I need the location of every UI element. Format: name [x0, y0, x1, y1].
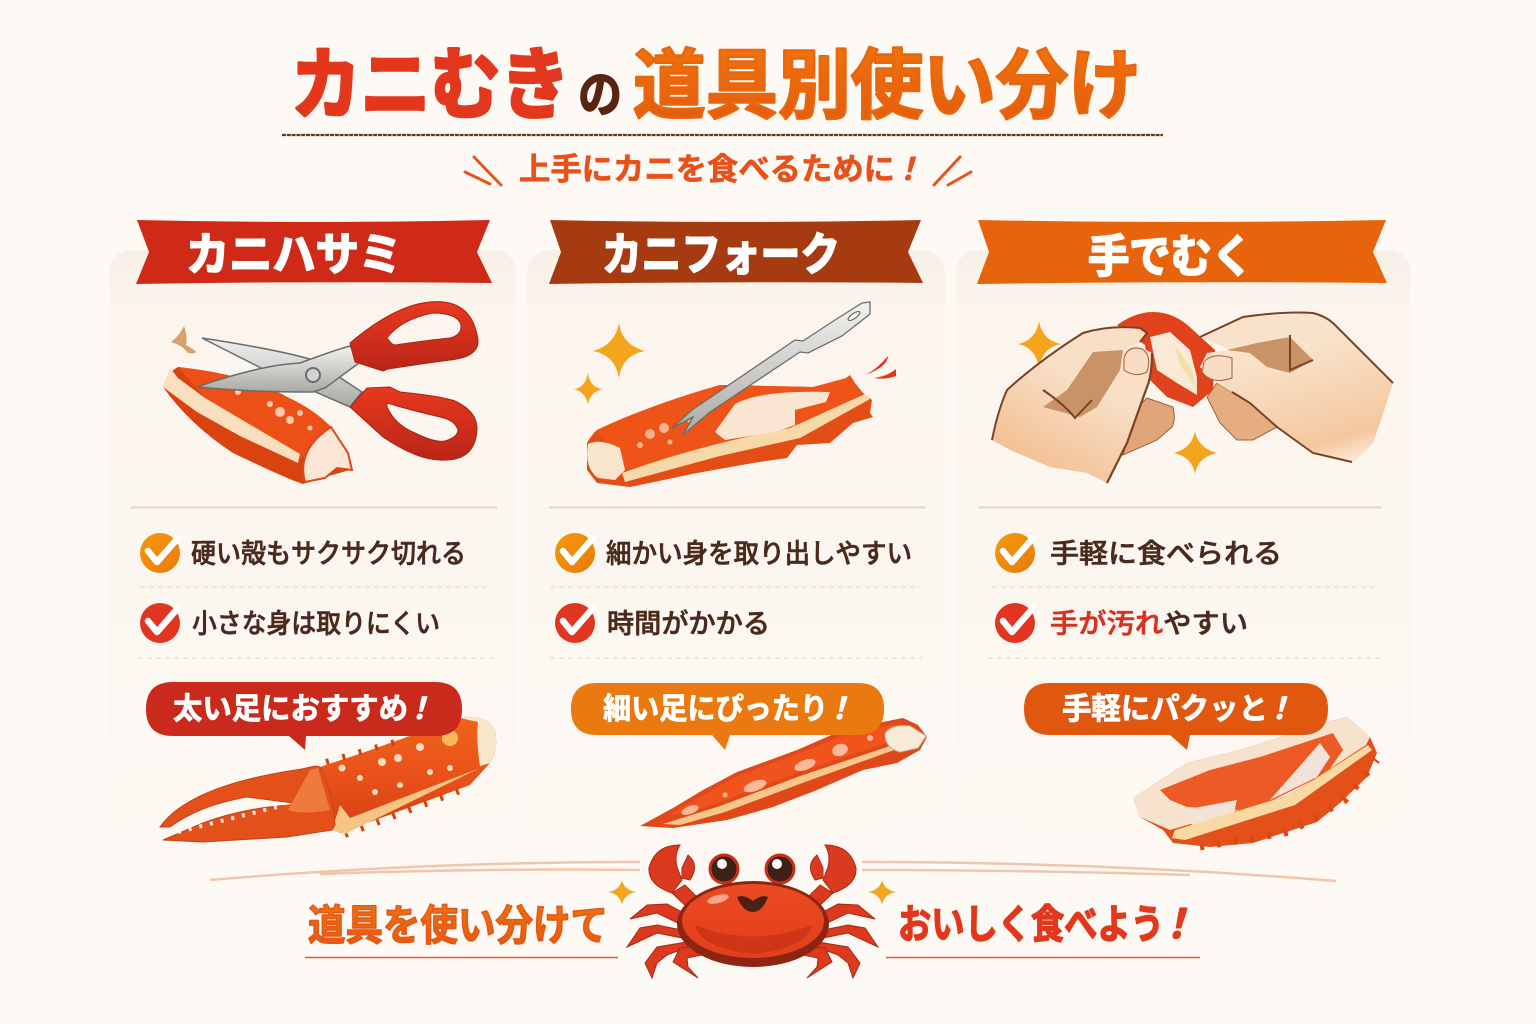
- left hand fingers behind: [1123, 398, 1174, 455]
- panel: カニフォーク: [527, 220, 945, 870]
- speech bubble: [1024, 683, 1328, 750]
- demerit row: 時間がかかる: [607, 609, 770, 639]
- icon: right accent strokes: [934, 157, 971, 185]
- upper handle: [350, 302, 478, 371]
- illustration: thin crab leg: [640, 718, 927, 828]
- droplets: [171, 326, 196, 353]
- illustration: hands peeling crab: [992, 312, 1393, 483]
- fork: [672, 302, 870, 435]
- ribbon heading: [977, 220, 1387, 284]
- icon: footer sparkle left: [608, 880, 636, 905]
- ribbon heading: カニハサミ: [186, 229, 402, 280]
- crab mascot: [627, 845, 878, 978]
- merit row: [995, 533, 1282, 573]
- footer message left: 道具を使い分けて: [308, 902, 608, 949]
- icon: small sparkle: [574, 373, 603, 404]
- ribbon heading: カニフォーク: [602, 229, 840, 280]
- icon: orange check: [140, 533, 180, 573]
- merit row: [555, 533, 912, 573]
- speech bubble: ！: [404, 693, 434, 726]
- illustration: peeled crab piece: [1133, 717, 1377, 847]
- speech bubble: [571, 683, 884, 750]
- merit row: [140, 533, 466, 573]
- icon: red check: [140, 603, 180, 643]
- footer message right: ！: [1156, 903, 1196, 947]
- speech bubble: 細い足にぴったり: [603, 693, 828, 726]
- demerit row: [140, 603, 440, 643]
- left hand: [992, 327, 1152, 483]
- demerit row: [555, 603, 770, 643]
- icon: red check: [995, 603, 1035, 643]
- shell body: [677, 881, 829, 967]
- icon: red check: [555, 603, 595, 643]
- subtitle: ！: [892, 152, 923, 187]
- ribbon heading: [549, 220, 923, 284]
- speech bubble: [146, 682, 462, 750]
- illustration: crab fork in leg: [574, 302, 896, 487]
- right hand: [1200, 312, 1393, 463]
- icon: footer sparkle right: [868, 880, 896, 905]
- illustration: scissors cutting crab leg: [163, 302, 478, 484]
- icon: orange check: [555, 533, 595, 573]
- legs and claws right: [803, 845, 878, 978]
- subtitle: 上手にカニを食べるために: [519, 152, 895, 187]
- ribbon heading: 手でむく: [1088, 231, 1253, 282]
- merit row: 細かい身を取り出しやすい: [606, 539, 912, 569]
- crab piece: [1117, 312, 1215, 407]
- ribbon heading: [136, 220, 492, 284]
- title: カニむき: [291, 41, 570, 129]
- blades: [197, 338, 363, 407]
- title: [291, 41, 1141, 129]
- icon: sparkle: [1174, 431, 1217, 474]
- separator: [549, 506, 926, 509]
- speech bubble: ！: [824, 693, 854, 726]
- smile: [737, 896, 768, 912]
- crab leg open: [587, 375, 873, 487]
- right hand fingers behind: [1207, 383, 1277, 440]
- speech bubble: ！: [1264, 693, 1294, 726]
- merit row: 硬い殻もサクサク切れる: [191, 539, 466, 569]
- merit row: 手軽に食べられる: [1050, 539, 1282, 569]
- demerit row: 小さな身は取りにくい: [192, 609, 440, 639]
- lower handle: [350, 387, 477, 460]
- icon: left accent strokes: [465, 157, 501, 185]
- separator: [978, 506, 1382, 509]
- speech bubble: 手軽にパクッと: [1062, 693, 1268, 726]
- eyes: [710, 855, 794, 888]
- panel: 手でむく: [956, 220, 1411, 870]
- icon: large sparkle: [593, 323, 645, 378]
- legs and claws left: [627, 845, 702, 978]
- demerit row: [995, 603, 1248, 643]
- panel: カニハサミ: [109, 220, 516, 870]
- title: 道具別使い分け: [633, 44, 1141, 129]
- crab leg piece: [163, 367, 352, 484]
- speech bubble: 太い足におすすめ: [173, 693, 408, 726]
- separator: [131, 506, 497, 509]
- title: の: [578, 67, 622, 123]
- icon: sparkle: [1018, 321, 1061, 368]
- illustration: thick crab claw: [160, 717, 496, 842]
- demerit row: 手が汚れやすい: [1050, 609, 1248, 639]
- icon: red accent strokes: [866, 356, 896, 379]
- footer message right: おいしく食べよう: [898, 903, 1164, 947]
- icon: orange check: [995, 533, 1035, 573]
